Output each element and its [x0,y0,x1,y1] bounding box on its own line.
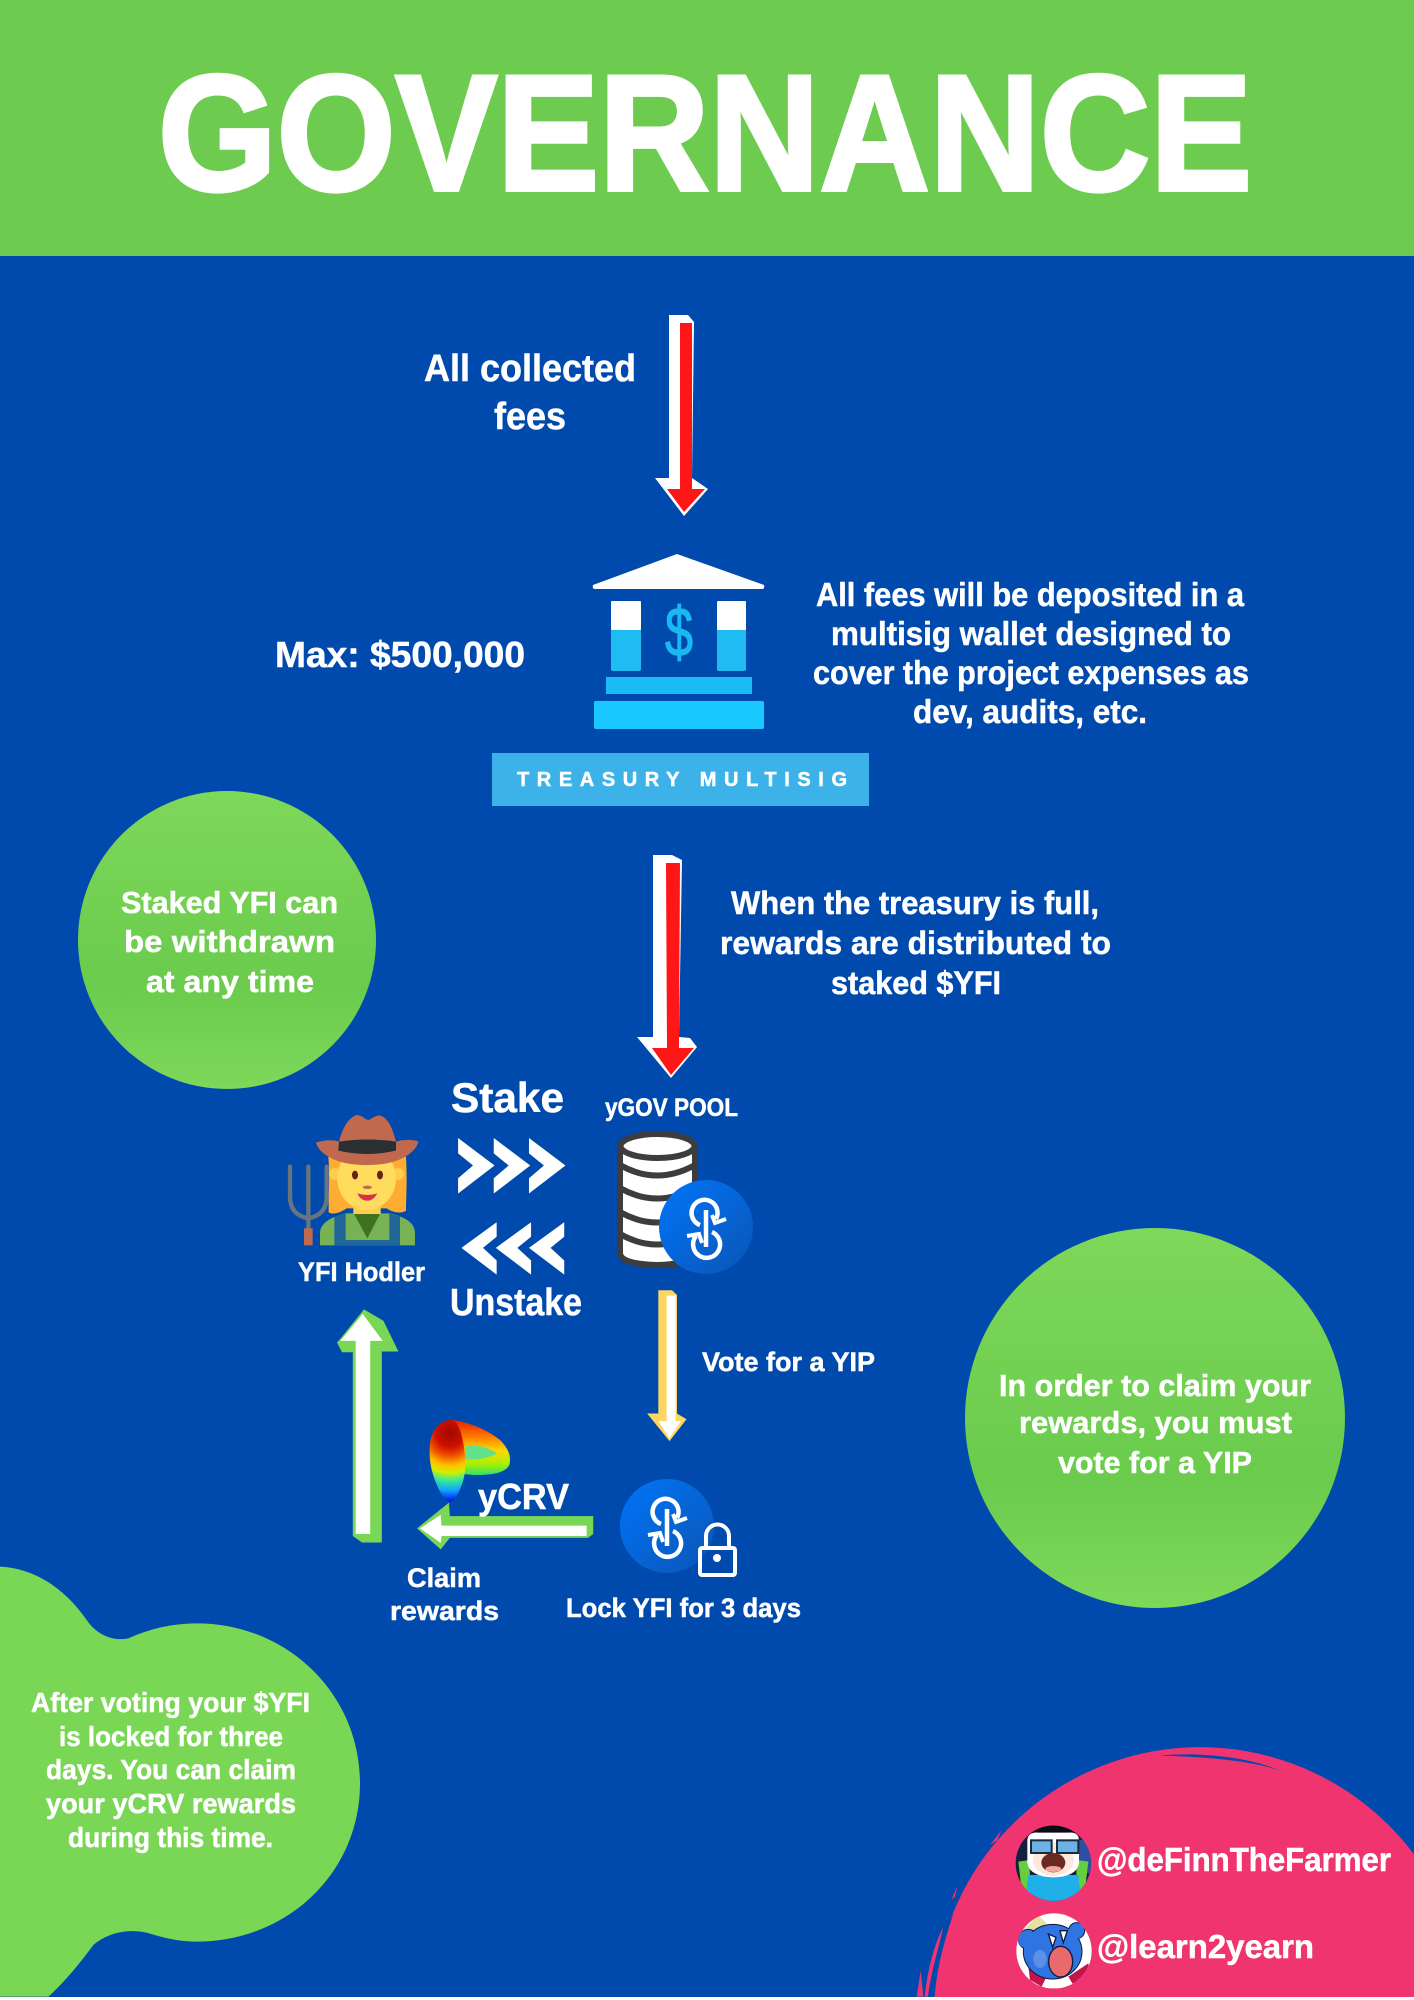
label: YFI hodler: YFI Hodler [298,1257,425,1287]
arrow: claim rewards [417,1503,593,1549]
callout: locked three days blob: After voting your $YFI [31,1687,310,1718]
header band [0,0,1414,256]
callout: staked YFI withdrawn [78,791,376,1089]
label: all collected fees: All collected [424,348,636,390]
icon: treasury bank: $ [665,593,693,671]
icon: stake chevrons [458,1138,565,1193]
handle: learn2yearn: @learn2yearn [1097,1928,1314,1965]
text: multisig description [813,576,1249,730]
text: rewards distributed: When the treasury is full, [731,885,1099,921]
text: multisig description: cover the project expenses as [813,654,1249,691]
icon: treasury bank [593,554,764,729]
icon: curve logo [430,1420,510,1502]
label: yGOV pool: yGOV POOL [605,1094,738,1122]
icon: unstake chevrons [461,1222,564,1275]
text: multisig description: multisig wallet designed to [831,615,1231,652]
callout: staked YFI withdrawn: at any time [146,964,314,999]
callout: claim requires vote: vote for a YIP [1058,1445,1252,1480]
text: multisig description: All fees will be deposited in a [816,576,1245,613]
label: lock YFI: Lock YFI for 3 days [566,1593,801,1623]
callout: claim requires vote: rewards, you must [1019,1405,1292,1440]
arrow: vote [647,1290,687,1441]
text: rewards distributed: rewards are distributed to [720,925,1111,961]
label: yCRV: yCRV [478,1476,569,1517]
callout: locked three days blob: your yCRV rewards [46,1788,296,1819]
label: all collected fees [424,348,636,438]
icon: database [620,1134,695,1265]
label: claim rewards: Claim [407,1563,481,1593]
label: unstake: Unstake [450,1282,582,1324]
icon: farmer [290,1115,418,1245]
title: GOVERNANCE [158,41,1252,225]
label: claim rewards [390,1563,499,1626]
callout: locked three days blob [0,1567,360,1997]
handle: deFinnTheFarmer: @deFinnTheFarmer [1097,1841,1391,1878]
treasury multisig label: TREASURY MULTISIG [517,769,847,791]
avatar: learn2yearn [1015,1912,1093,1988]
treasury multisig label [492,753,869,806]
callout: claim requires vote: In order to claim your [999,1368,1311,1403]
callout: locked three days blob: is locked for three [59,1721,283,1752]
callout: staked YFI withdrawn: be withdrawn [124,924,335,959]
panel: credits [917,1747,1414,1997]
callout: claim requires vote [965,1228,1345,1608]
arrow: collected fees into treasury [655,315,708,516]
callout: staked YFI withdrawn: Staked YFI can [121,885,338,920]
brush circle [917,1747,1414,1997]
callout: locked three days blob: days. You can claim [46,1754,296,1785]
arrow: rewards back to hodler [337,1309,398,1542]
icon: yearn coin on pool [659,1180,753,1274]
text: rewards distributed: staked $YFI [831,965,1001,1001]
label: claim rewards: rewards [390,1596,499,1626]
label: vote for a YIP: Vote for a YIP [702,1347,875,1377]
label: all collected fees: fees [494,396,566,438]
text: rewards distributed [720,885,1111,1001]
icon: padlock [700,1524,735,1575]
arrow: treasury to yGOV pool [637,855,697,1078]
callout: locked three days blob: during this time. [68,1822,273,1853]
label: stake: Stake [451,1074,564,1121]
label: max amount: Max: $500,000 [275,634,525,675]
avatar: deFinn [1015,1825,1092,1902]
icon: yearn coin locked [620,1479,714,1573]
text: multisig description: dev, audits, etc. [913,693,1147,730]
